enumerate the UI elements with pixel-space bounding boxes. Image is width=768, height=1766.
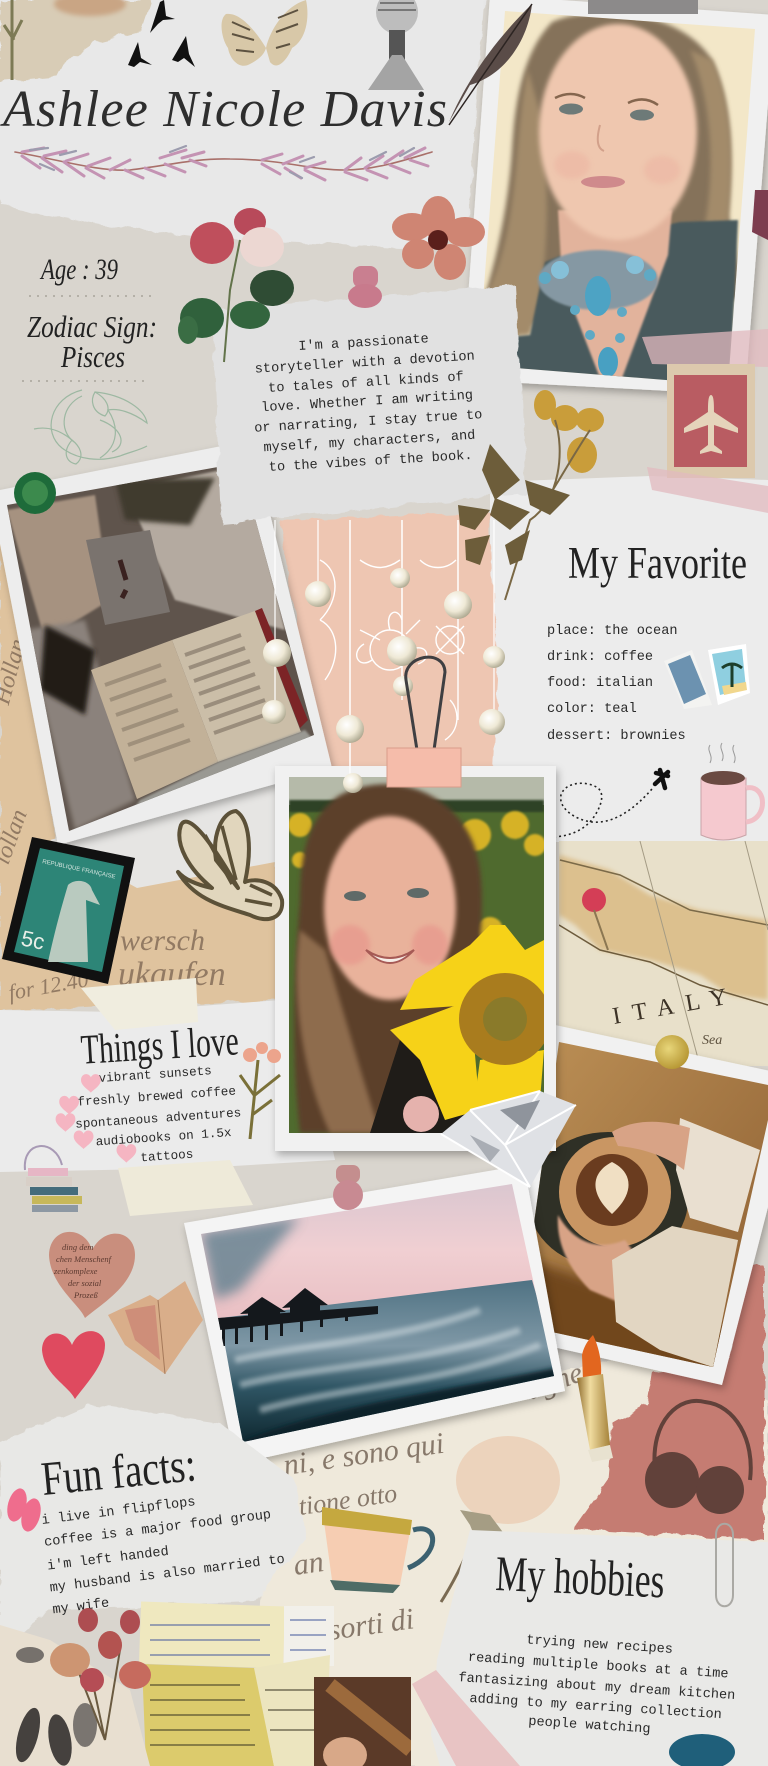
intro text: to tales of all kinds of bbox=[268, 370, 464, 397]
list: things I love: spontaneous adventures bbox=[75, 1106, 242, 1132]
list: hobbies: people watching bbox=[528, 1715, 651, 1738]
icon: stack of books bbox=[25, 1146, 82, 1212]
list: favorites bbox=[547, 624, 686, 744]
icon: red heart bbox=[42, 1331, 105, 1399]
list: hobbies: adding to my earring collection bbox=[469, 1692, 722, 1723]
list: hobbies bbox=[455, 1629, 738, 1743]
heading: My hobbies: My hobbies bbox=[495, 1545, 666, 1608]
panel: script letter paper: ughe bbox=[521, 1356, 587, 1407]
icon: dried flower bbox=[441, 1436, 560, 1602]
shirt bbox=[517, 218, 740, 380]
panel: map of Italy: Sea bbox=[702, 1033, 722, 1048]
panel: intro note card bbox=[212, 285, 527, 523]
list: favorites: food: italian bbox=[547, 676, 653, 691]
icon: teacup bbox=[322, 1507, 433, 1593]
list: fun facts: i live in flipflops bbox=[41, 1495, 196, 1529]
hair bbox=[484, 15, 738, 324]
icon: flower sprig bbox=[240, 1042, 281, 1139]
icon: green wax seal bbox=[14, 472, 56, 514]
background sunflowers bbox=[288, 811, 546, 943]
panel: Things I love paper bbox=[0, 1000, 335, 1172]
tape: bottom pink bbox=[647, 467, 768, 513]
list: favorites: dessert: brownies bbox=[547, 729, 686, 744]
list: things I love: tattoos bbox=[140, 1148, 194, 1165]
intro text: love. Whether I am writing bbox=[261, 389, 473, 416]
icon: green postage stamp bbox=[2, 837, 135, 984]
intro text: or narrating, I stay true to bbox=[254, 408, 483, 437]
glitter paper strip bbox=[752, 190, 768, 240]
intro text: I'm a passionate bbox=[298, 332, 429, 355]
age and zodiac text block: Pisces bbox=[60, 339, 125, 374]
upper sweater bbox=[676, 1118, 760, 1232]
list: favorites: color: teal bbox=[547, 702, 637, 717]
panel: title paper bbox=[0, 0, 485, 248]
icon: dotted flight path bbox=[554, 770, 668, 837]
pier bbox=[218, 1288, 378, 1346]
panel: script letter paper bbox=[250, 1350, 768, 1766]
icon: text paper heart: chen Menschenf bbox=[56, 1254, 113, 1264]
icon: travel photos bbox=[664, 644, 750, 709]
icon: text paper heart: Prozeß bbox=[73, 1290, 99, 1300]
old book page corner bbox=[0, 0, 152, 82]
necklace bbox=[538, 250, 658, 310]
icon: pisces fish bbox=[34, 390, 147, 464]
panel: script letter paper: ni, e sono qui bbox=[281, 1427, 446, 1482]
icon: vintage butterfly bbox=[178, 811, 282, 919]
tape: top pink bbox=[642, 329, 768, 367]
list: things I love bbox=[72, 1062, 244, 1170]
lower sweater bbox=[612, 1226, 738, 1367]
intro text: myself, my characters, and bbox=[263, 429, 476, 456]
icon: push pin bbox=[348, 266, 382, 308]
panel: hobbies paper bbox=[431, 1530, 768, 1766]
list: things I love: audiobooks on 1.5x bbox=[95, 1126, 232, 1149]
list: favorites: place: the ocean bbox=[547, 624, 678, 639]
neck bbox=[558, 210, 672, 378]
icon: gold pin bbox=[655, 1035, 689, 1069]
photo frame: coffee bbox=[500, 1025, 768, 1385]
panel: rose paper bbox=[573, 1266, 764, 1540]
age and zodiac text block: Age : 39 bbox=[39, 253, 118, 286]
age and zodiac text block: Zodiac Sign: bbox=[27, 309, 157, 344]
photo frame: open books bbox=[0, 440, 332, 845]
icon: lipstick bbox=[577, 1335, 613, 1462]
facial features bbox=[344, 891, 366, 901]
intro text bbox=[249, 329, 485, 477]
icon: binder clip bbox=[387, 657, 461, 787]
panel: map of Italy: ITALY bbox=[611, 982, 741, 1030]
panel: recipe cards bbox=[139, 1602, 334, 1766]
icon: text paper heart bbox=[49, 1232, 135, 1318]
icon: dried roses bbox=[50, 1608, 151, 1740]
pearl strings bbox=[262, 520, 505, 793]
panel: handwritten tan letter: wersch bbox=[120, 924, 205, 957]
list: fun facts bbox=[41, 1485, 288, 1618]
panel: script letter paper: an na bbox=[291, 1540, 363, 1582]
big sunflower bbox=[390, 925, 544, 1133]
list: fun facts: coffee is a major food group bbox=[43, 1508, 272, 1551]
clip at top of selfie bbox=[588, 0, 698, 14]
icon: pink hearts bbox=[56, 1074, 136, 1163]
list: fun facts: my wife bbox=[52, 1596, 110, 1618]
panel: script letter paper: tione otto bbox=[297, 1478, 399, 1521]
icon: headphones bbox=[645, 1401, 751, 1514]
list: fun facts: my husband is also married to bbox=[49, 1553, 286, 1596]
intro text: to the vibes of the book. bbox=[268, 449, 473, 476]
icon: airmail stamp bbox=[667, 364, 755, 478]
photo: rolling pin bbox=[314, 1677, 411, 1766]
icon: text paper heart: der sozial bbox=[68, 1278, 102, 1288]
tape: cream top bbox=[81, 978, 198, 1030]
photo frame: selfie bbox=[462, 0, 768, 400]
icon: terracotta flower bbox=[392, 196, 485, 280]
icon: blue flower bbox=[669, 1734, 735, 1766]
hair bbox=[294, 784, 482, 1133]
photo frame: sunflower selfie bbox=[275, 766, 556, 1151]
panel: fun facts paper bbox=[0, 1404, 306, 1647]
dark clothing bbox=[370, 1040, 465, 1133]
icon: text paper heart: ding dem bbox=[62, 1242, 93, 1252]
age and zodiac text block bbox=[22, 253, 157, 381]
facial features bbox=[559, 104, 583, 114]
list: favorites: drink: coffee bbox=[547, 650, 653, 665]
intro text: storyteller with a devotion bbox=[254, 350, 475, 378]
icon: paperclip bbox=[716, 1524, 733, 1606]
icon: pink push pin bbox=[333, 1165, 363, 1210]
icon: feather bbox=[449, 4, 532, 125]
list: hobbies: fantasizing about my dream kitchen bbox=[458, 1671, 736, 1704]
lower hand bbox=[556, 1214, 632, 1302]
icon: paper butterfly bbox=[222, 0, 307, 66]
icon: diamond bbox=[441, 1091, 576, 1187]
face bbox=[539, 24, 697, 240]
icon: birds bbox=[128, 0, 195, 67]
icon: yellow flowers and dry leaves bbox=[458, 390, 604, 600]
face bbox=[324, 816, 456, 1000]
icon: coffee mug bbox=[701, 743, 762, 840]
icon: text paper heart: zenkomplexe bbox=[53, 1266, 98, 1276]
photo frame: pier at sunset bbox=[184, 1165, 565, 1464]
list: things I love: vibrant sunsets bbox=[98, 1064, 212, 1086]
tape: cream bottom bbox=[118, 1160, 253, 1216]
title: Ashlee Nicole Davis bbox=[0, 81, 447, 138]
list: hobbies: reading multiple books at a time bbox=[467, 1651, 729, 1683]
list: fun facts: i'm left handed bbox=[46, 1545, 170, 1575]
list: hobbies: trying new recipes bbox=[526, 1633, 673, 1658]
icon: rose bouquet bbox=[178, 208, 294, 362]
list: things I love: freshly brewed coffee bbox=[77, 1085, 236, 1110]
icon: green postage stamp: 5c bbox=[19, 925, 47, 955]
panel: script letter paper: sorti di bbox=[326, 1602, 416, 1647]
icon: microphone bbox=[368, 0, 424, 90]
upper hand bbox=[612, 1122, 690, 1170]
heading: Things I love: Things I love bbox=[79, 1018, 240, 1074]
heading: Fun facts: Fun facts: bbox=[39, 1438, 198, 1506]
tape: pink bottom bbox=[412, 1670, 520, 1766]
garland bbox=[15, 146, 432, 180]
panel: handwritten tan letter: for 12.40 bbox=[7, 966, 90, 1005]
panel: floral botanical paper bbox=[0, 1625, 150, 1766]
light paper patch bbox=[50, 765, 330, 888]
panel: floral pink paper bbox=[280, 512, 498, 770]
icon: origami heart bbox=[108, 1281, 203, 1374]
panel: handwritten tan letter bbox=[0, 530, 290, 1012]
icon: green postage stamp: REPUBLIQUE FRANÇAISE bbox=[42, 859, 116, 880]
panel: map of Italy bbox=[559, 841, 768, 1066]
panel: My Favorite paper bbox=[490, 476, 768, 842]
panel: handwritten tan letter: ukaufen bbox=[118, 956, 226, 993]
icon: flip flops bbox=[4, 1486, 44, 1534]
